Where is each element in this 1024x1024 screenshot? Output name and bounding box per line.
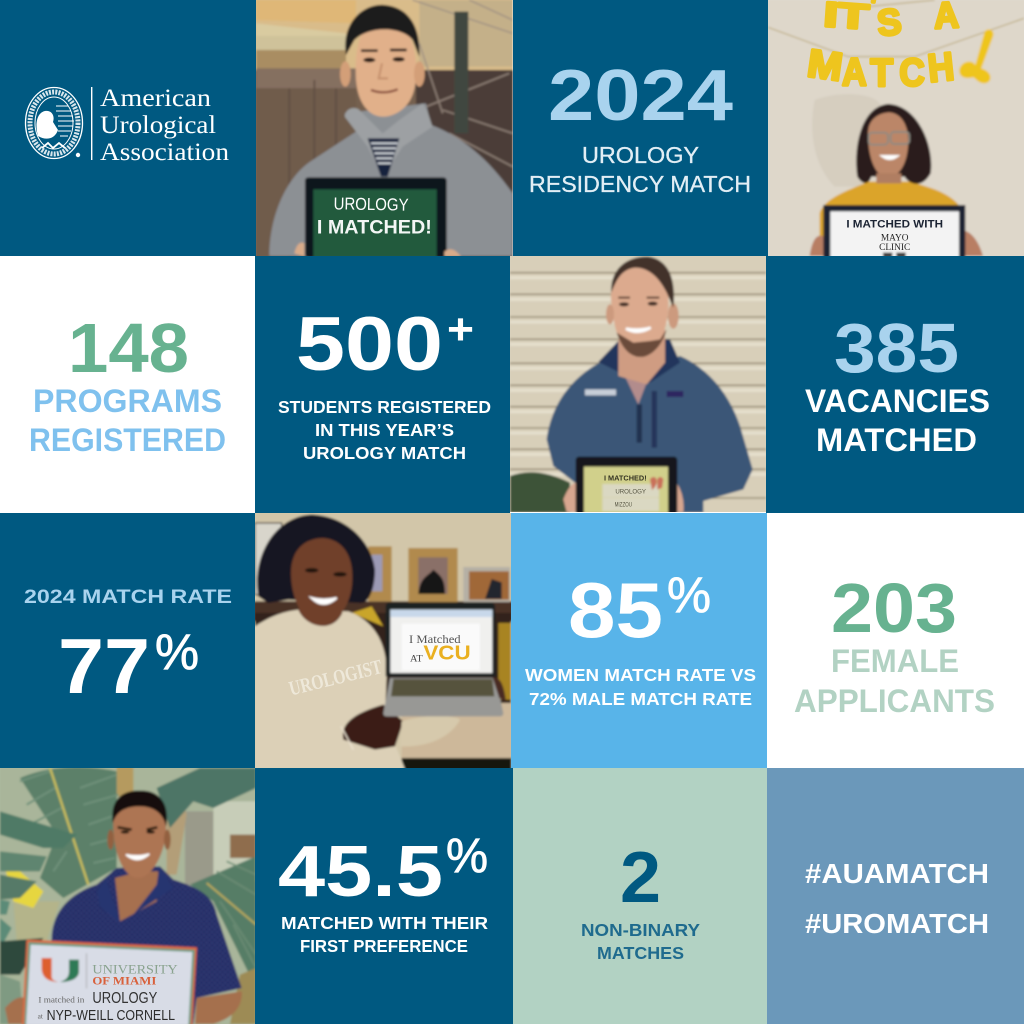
- stat number 85%: 85: [568, 566, 663, 654]
- photo: man with University of Miami sign: [0, 766, 258, 1024]
- stat number 85%: %: [667, 567, 711, 623]
- title year: 2024: [548, 56, 733, 136]
- stat number 203: 203: [831, 569, 957, 647]
- tablet sign text: UROLOGY: [615, 489, 646, 495]
- banner letters: S: [875, 1, 903, 44]
- sign text: MAYO: [881, 234, 909, 244]
- stat number 85%: [568, 566, 711, 654]
- banner letters: T: [870, 51, 893, 95]
- stat number 77%: 77: [58, 622, 150, 710]
- stat label: FIRST PREFERENCE: [300, 936, 468, 956]
- stat label: APPLICANTS: [794, 683, 995, 719]
- tablet sign text: [318, 198, 430, 234]
- stat number 148: 148: [68, 309, 189, 387]
- tablet sign text: [604, 476, 646, 506]
- hashtag text: #AUAMATCH: [805, 858, 989, 889]
- panel: vacancies matched: [766, 256, 1024, 513]
- sweater text: UROLOGIST: [287, 656, 385, 701]
- stat label: [794, 643, 995, 719]
- stat label: IN THIS YEAR’S: [315, 420, 454, 440]
- stat number 45.5%: %: [446, 830, 488, 883]
- laptop screen text: I Matched: [409, 634, 461, 646]
- sign text: UROLOGY: [92, 990, 157, 1007]
- tablet sign text: MIZZOU: [615, 503, 632, 509]
- tablet sign text: UROLOGY: [333, 193, 409, 215]
- stat label: PROGRAMS: [33, 383, 222, 419]
- stat number 500+: +: [447, 305, 474, 354]
- logo wordmark: Association: [100, 139, 230, 166]
- sign text: NYP-WEILL CORNELL: [47, 1008, 175, 1024]
- stat label: FEMALE: [831, 643, 959, 679]
- stat label: UROLOGY MATCH: [303, 443, 466, 463]
- stat number 45.5%: 45.5: [278, 832, 443, 912]
- sign text: I MATCHED WITH: [846, 218, 943, 230]
- banner letters: [805, 0, 960, 95]
- stat label: MATCHES: [597, 943, 684, 963]
- logo wordmark: [100, 85, 230, 166]
- stat number 2: 2: [620, 838, 661, 918]
- stat label: [29, 383, 226, 458]
- stat number 45.5%: [278, 830, 488, 912]
- stat label: 72% MALE MATCH RATE: [529, 689, 752, 709]
- photo: man in grey fleece with tablet: [254, 0, 514, 258]
- sign text: [38, 965, 178, 1020]
- title subtitle: [529, 142, 751, 197]
- hashtag text: [805, 858, 989, 939]
- photo: woman with it's a match banner: [766, 0, 1024, 258]
- stat label: [581, 920, 700, 963]
- photo: woman with laptop: [253, 511, 513, 771]
- stat label: [281, 913, 488, 956]
- sign text: UNIVERSITY: [92, 962, 178, 976]
- stat label: [525, 665, 756, 709]
- laptop screen text: VCU: [423, 642, 471, 665]
- stat label: NON-BINARY: [581, 920, 700, 940]
- banner letters: H: [926, 44, 956, 91]
- stat label: [805, 383, 990, 458]
- panel: logo: [0, 0, 256, 256]
- banner letters: C: [899, 50, 925, 94]
- tablet sign text: I MATCHED!: [604, 474, 647, 483]
- panel: students registered: [255, 256, 510, 513]
- title subtitle: RESIDENCY MATCH: [529, 171, 751, 197]
- laptop screen text: AT: [410, 654, 423, 664]
- stat label: [278, 397, 491, 463]
- tablet sign text: I MATCHED!: [317, 217, 432, 238]
- logo wordmark: Urological: [100, 112, 216, 139]
- laptop screen text: [409, 635, 470, 662]
- banner letters: M: [805, 41, 845, 90]
- stat label: STUDENTS REGISTERED: [278, 397, 491, 417]
- sign text: at: [38, 1012, 43, 1021]
- stat label: MATCHED: [816, 422, 977, 458]
- icon: AUA seal: [26, 88, 82, 158]
- title subtitle: UROLOGY: [582, 142, 699, 168]
- stat label: VACANCIES: [805, 383, 990, 419]
- stat number 77%: %: [155, 624, 199, 680]
- panel: title: [513, 0, 768, 256]
- panel: women match rate: [511, 513, 767, 768]
- panel: female applicants: [767, 513, 1024, 768]
- banner letters: A: [842, 51, 867, 95]
- panel: programs registered: [0, 256, 255, 513]
- sign text: [847, 220, 942, 250]
- panel: non-binary matches: [513, 768, 767, 1024]
- sign text: I matched in: [38, 996, 84, 1005]
- hashtag text: #UROMATCH: [805, 908, 989, 939]
- panel: match rate: [0, 513, 255, 768]
- stat number 385: 385: [834, 309, 959, 387]
- stat label: REGISTERED: [29, 422, 226, 458]
- sign text: CLINIC: [879, 243, 910, 253]
- stat label: WOMEN MATCH RATE VS: [525, 665, 756, 685]
- panel: hashtags: [767, 768, 1024, 1024]
- stat number 77%: [58, 622, 199, 710]
- stat number 500+: 500: [296, 302, 443, 387]
- panel: first preference: [255, 768, 513, 1024]
- logo wordmark: American: [100, 85, 212, 112]
- stat label: 2024 MATCH RATE: [24, 587, 232, 608]
- stat label: MATCHED WITH THEIR: [281, 913, 488, 933]
- photo: man in navy fleece with tablet: [508, 254, 768, 515]
- sign text: OF MIAMI: [92, 974, 157, 988]
